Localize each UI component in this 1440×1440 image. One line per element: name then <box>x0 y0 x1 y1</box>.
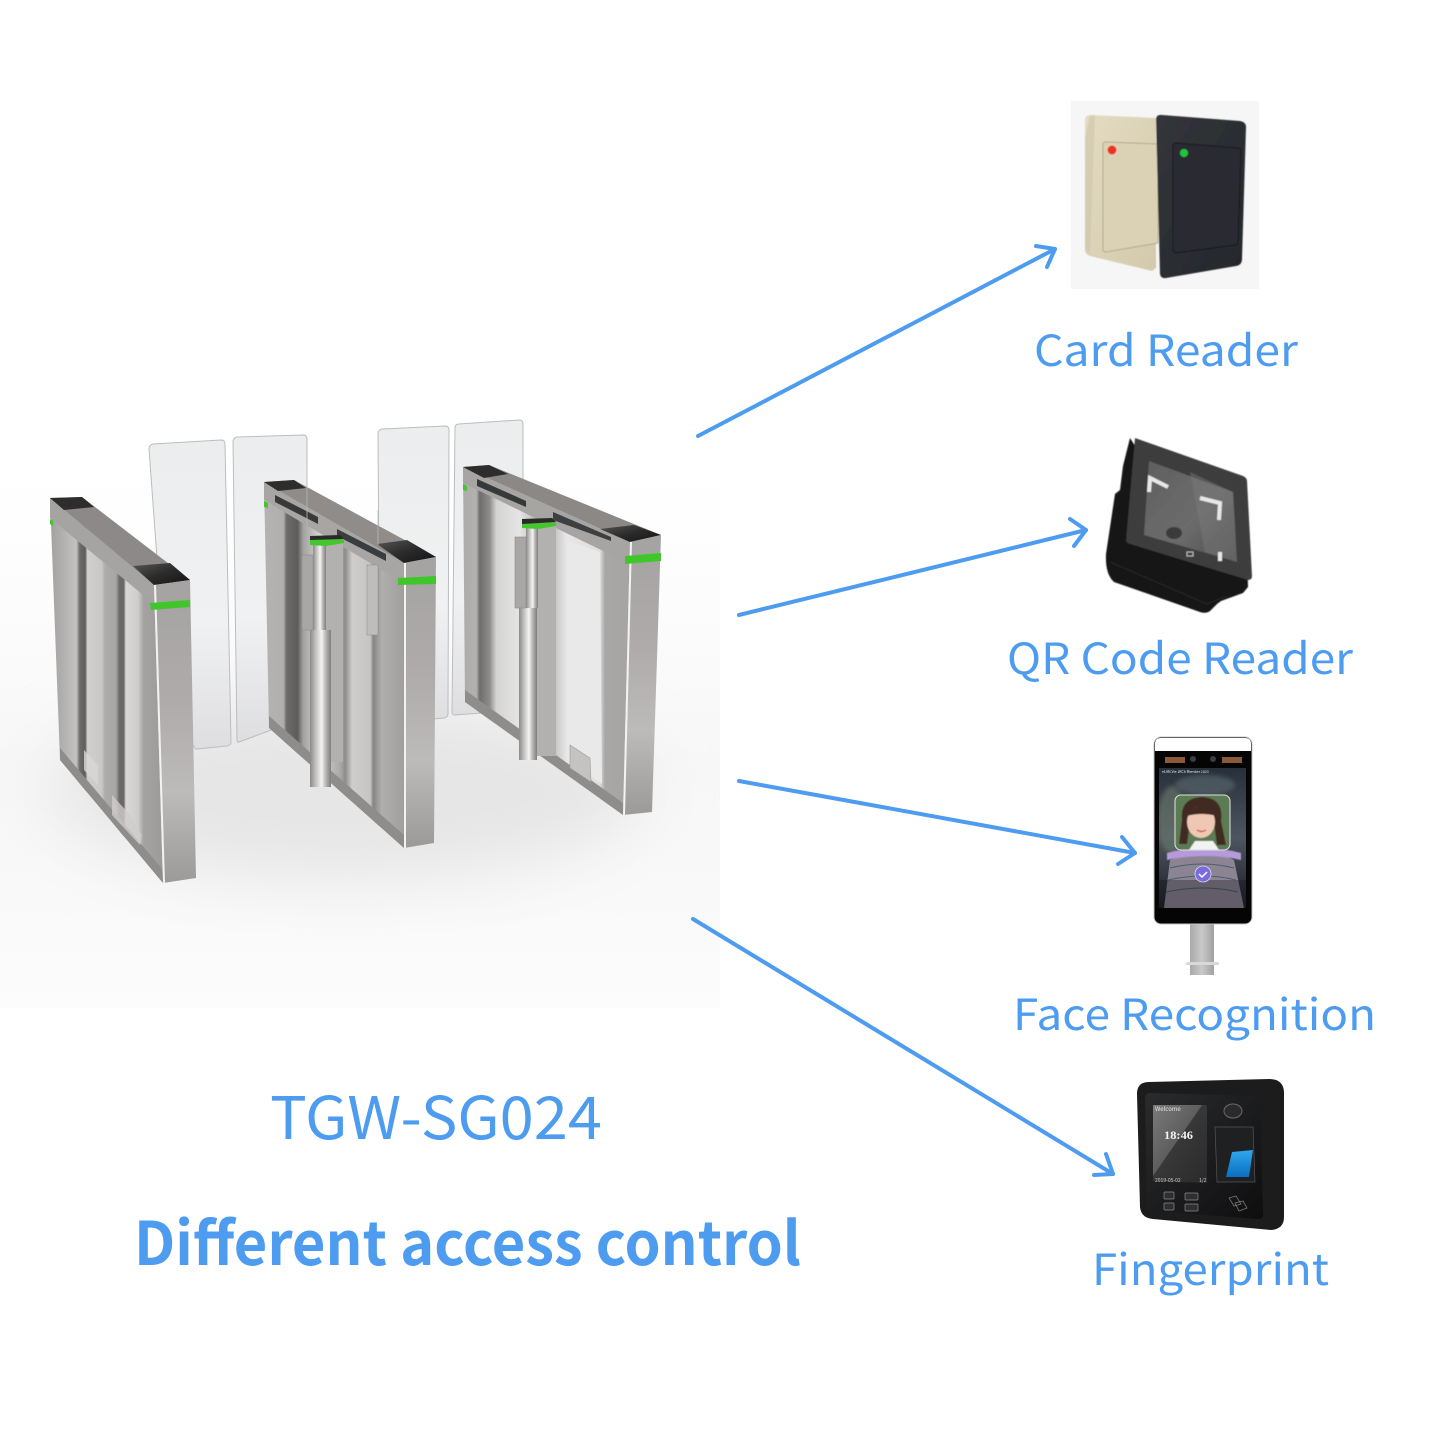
fingerprint terminal screen: 18:46 <box>1164 1128 1193 1142</box>
icon: card reader <box>1071 101 1259 289</box>
gate 3 cylinder <box>515 518 556 760</box>
pole <box>1186 924 1219 975</box>
label: Fingerprint: Fingerprint <box>1092 1236 1329 1298</box>
arrow: to card reader <box>698 246 1055 436</box>
terminal screen: eLAN-Vie 1KCh Member 1823 <box>1162 770 1209 775</box>
icon: QR code reader <box>1106 438 1252 613</box>
fingerprint terminal screen <box>1153 1104 1207 1184</box>
face frame <box>1175 795 1230 850</box>
product image: TGW-SG024 swing gates <box>0 420 720 1008</box>
check badge <box>1195 866 1211 882</box>
fingerprint terminal screen: 2019-05-02 <box>1155 1177 1181 1184</box>
label: Face Recognition: Face Recognition <box>1013 981 1376 1043</box>
fingerprint sensor <box>1215 1127 1255 1182</box>
camera <box>1224 1104 1242 1118</box>
gate 2 (middle) <box>264 480 436 848</box>
gate 2 cylinder <box>302 535 378 787</box>
arrow: to fingerprint <box>693 919 1113 1175</box>
label: Card Reader: Card Reader <box>1034 317 1298 379</box>
terminal body <box>1154 737 1252 924</box>
arrow: to QR code reader <box>739 519 1086 615</box>
label: QR Code Reader: QR Code Reader <box>1007 625 1353 687</box>
keypad buttons <box>1164 1192 1198 1211</box>
arrow: to face recognition <box>739 781 1135 864</box>
terminal screen <box>1158 768 1246 908</box>
image backdrop with floor shadow <box>0 470 720 1008</box>
gate 1 (left) <box>50 497 196 883</box>
icon: face recognition terminal <box>1154 737 1252 975</box>
fingerprint terminal screen: Welcome <box>1155 1104 1181 1113</box>
RFID mark <box>1229 1196 1247 1211</box>
glass flap panels <box>149 420 523 749</box>
gate 3 (right) <box>463 465 661 815</box>
model name: TGW-SG024 <box>270 1071 602 1156</box>
icon: fingerprint terminal <box>1137 1079 1284 1230</box>
fingerprint terminal screen: 1/2 <box>1199 1177 1207 1184</box>
heading: Different access control: Different access control <box>134 1196 801 1283</box>
